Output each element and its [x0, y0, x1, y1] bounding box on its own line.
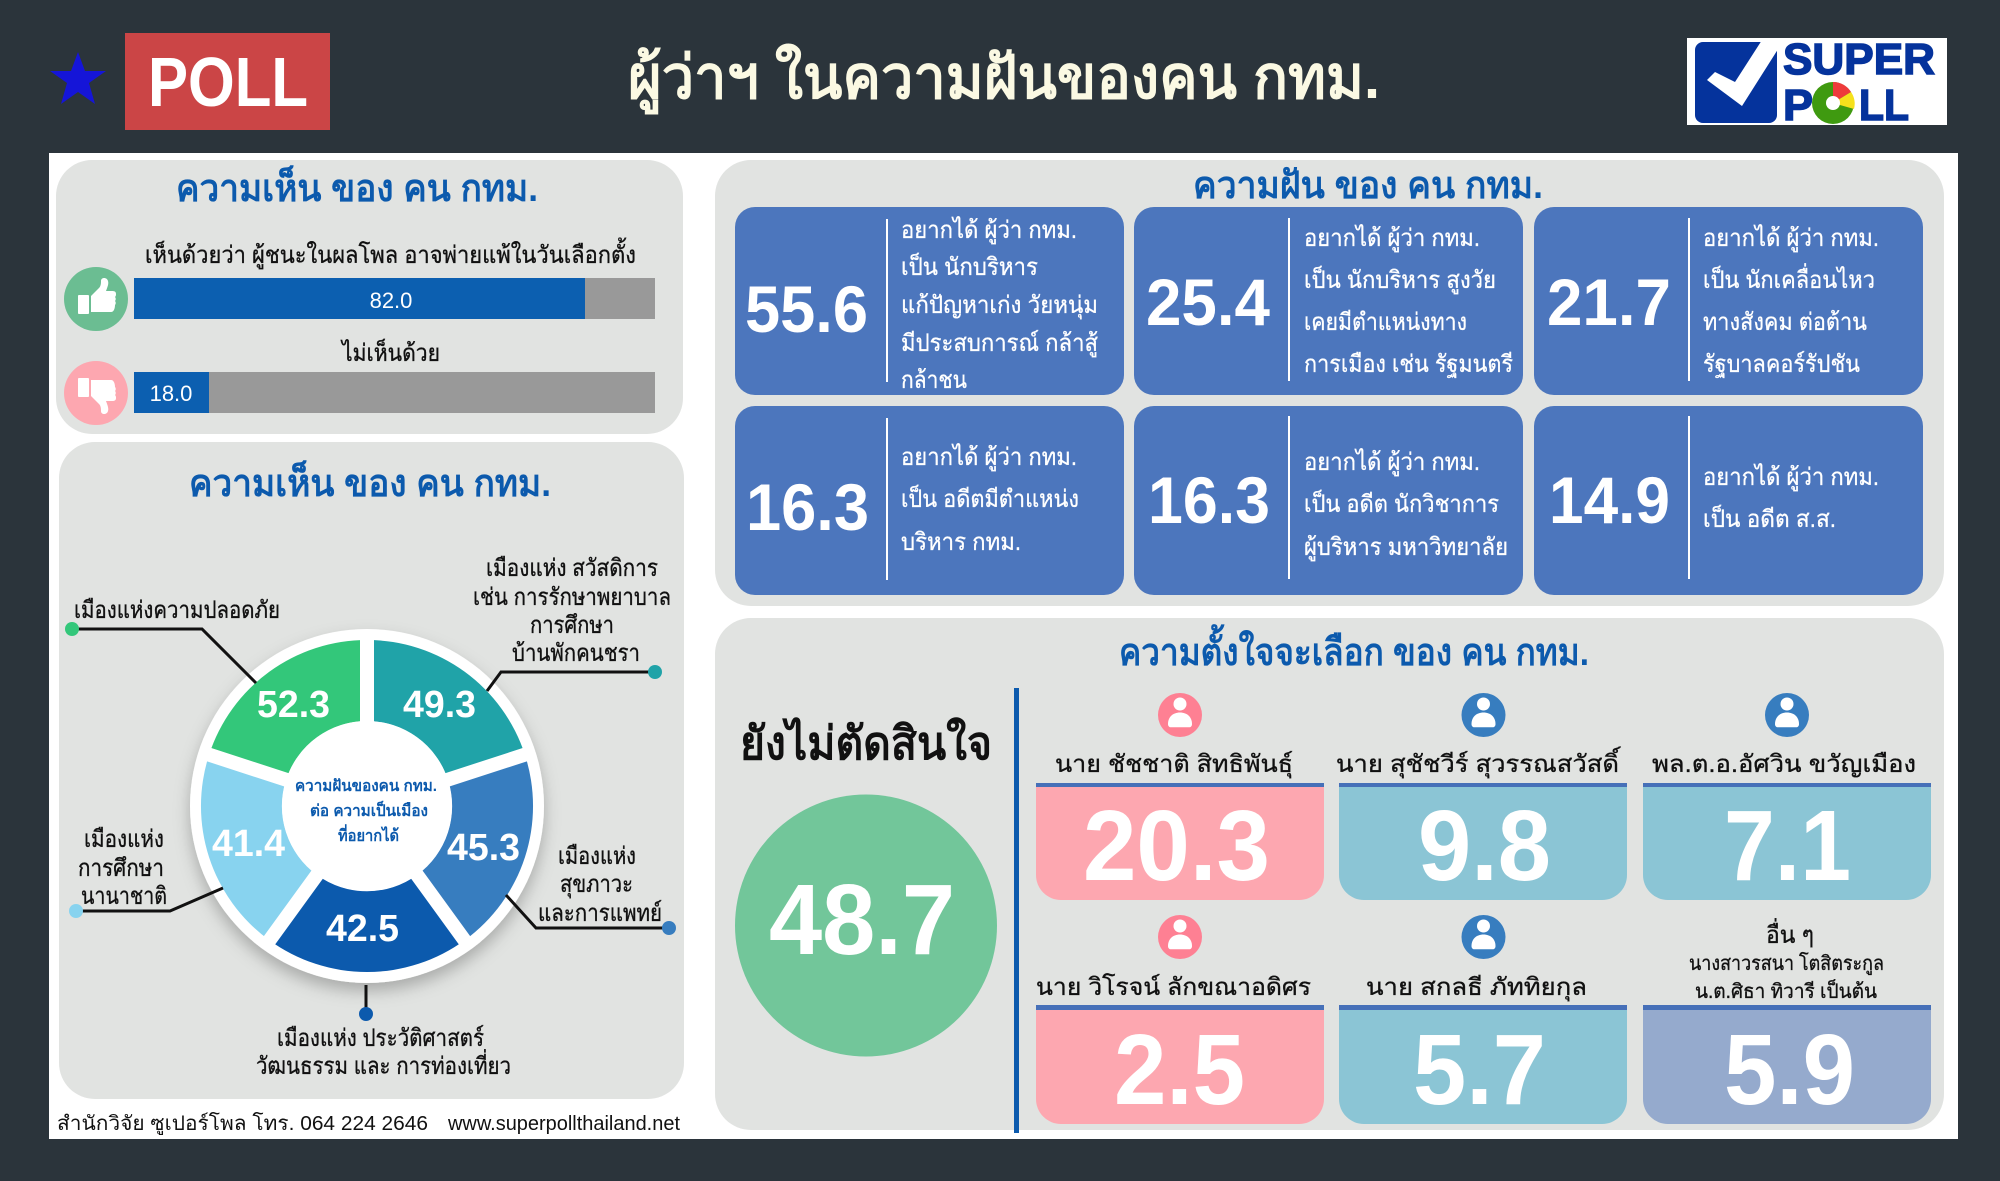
donut centre text: ความฝันของคน กทม.: [295, 777, 437, 795]
card: 14.9: เป็น อดีต ส.ส.: [1703, 504, 1836, 533]
footer source text: [57, 1112, 680, 1136]
candidate: Aswin 7.1: [1643, 693, 1931, 902]
segment: 45.3: [417, 755, 533, 940]
card: 16.3 former academic: [1134, 406, 1523, 595]
segment: 49.3: [367, 640, 525, 780]
callout: international education: นานาชาติ: [81, 883, 167, 910]
candidate: Suchatvee 9.8: 9.8: [1418, 790, 1551, 902]
callout: health: เมืองแห่ง: [558, 843, 636, 870]
callout: safety: เมืองแห่งความปลอดภัย: [74, 597, 280, 624]
card: 25.4: เคยมีตำแหน่งทาง: [1304, 309, 1467, 336]
card: 16.3 former academic: เป็น อดีต นักวิชาการ: [1304, 489, 1499, 518]
callout: history and culture: เมืองแห่ง ประวัติศาสตร์: [277, 1024, 484, 1052]
card: 25.4: [1134, 207, 1523, 395]
icon: thumbs up: [64, 267, 128, 331]
value: 52.3: 52.3: [257, 684, 330, 726]
undecided label: ยังไม่ตัดสินใจ: [740, 716, 992, 769]
segment: 41.4: [201, 755, 317, 940]
card: 55.6: มีประสบการณ์ กล้าสู้: [901, 329, 1098, 358]
label: agree statement: เห็นด้วยว่า ผู้ชนะในผลโพล อาจพ่ายแพ้ในวันเลือกตั้ง: [145, 237, 636, 270]
panel: opinion agree/disagree: [56, 160, 683, 434]
callout: health: สุขภาวะ: [560, 871, 633, 899]
card: 25.4: อยากได้ ผู้ว่า กทม.: [1304, 224, 1480, 253]
card: 21.7: รัฐบาลคอร์รัปชัน: [1703, 350, 1860, 378]
bar: disagree 18.0: 18.0: [150, 381, 192, 406]
donut centre text: ที่อยากได้: [338, 824, 399, 845]
candidate: others 5.9: [1643, 918, 1931, 1126]
panel: voting intention: [715, 618, 1944, 1133]
footer source text: สำนักวิจัย ซูเปอร์โพล โทร. 064 224 2646: [57, 1112, 428, 1136]
value: 45.3: 45.3: [447, 827, 520, 869]
candidate: Sakoltee 5.7: 5.7: [1413, 1014, 1546, 1126]
card: 16.3 former executive: บริหาร กทม.: [901, 529, 1021, 556]
callout: international education: [69, 826, 223, 918]
card: 14.9: [1534, 406, 1923, 595]
undecided value circle: [735, 794, 997, 1056]
candidate: Sakoltee 5.7: [1339, 915, 1627, 1126]
vertical divider: [1014, 688, 1019, 1133]
segment: 52.3: [209, 640, 367, 780]
candidate: Sakoltee 5.7: นาย สกลธี ภัททิยกุล: [1366, 974, 1587, 1002]
candidate: Chadchart 20.3: 20.3: [1083, 790, 1270, 902]
candidate: Aswin 7.1: 7.1: [1724, 790, 1851, 902]
header badge: POLL: POLL: [148, 43, 308, 121]
value: 49.3: 49.3: [403, 684, 476, 726]
card: 14.9: อยากได้ ผู้ว่า กทม.: [1703, 463, 1879, 492]
card: 55.6: เป็น นักบริหาร: [901, 252, 1038, 281]
callout: welfare: การศึกษา: [530, 612, 614, 639]
card: 21.7: ทางสังคม ต่อต้าน: [1703, 309, 1867, 336]
main title: ผู้ว่าฯ ในความฝันของคน กทม.: [628, 43, 1380, 115]
heading: dreams: ความฝัน ของ คน กทม.: [1193, 165, 1543, 207]
candidate: Aswin 7.1: พล.ต.อ.อัศวิน ขวัญเมือง: [1652, 751, 1916, 778]
bar: disagree 18.0: [134, 372, 655, 413]
card: 16.3 former executive: [735, 406, 1124, 595]
callout: international education: การศึกษา: [78, 855, 164, 882]
card: 55.6: [735, 207, 1124, 395]
card: 25.4: การเมือง เช่น รัฐมนตรี: [1304, 351, 1513, 378]
candidate: Suchatvee 9.8: นาย สุชัชวีร์ สุวรรณสวัสดิ์: [1336, 746, 1622, 779]
candidate: others 5.9: น.ต.ศิธา ทิวารี เป็นต้น: [1695, 978, 1877, 1003]
panel: city dream donut: [59, 442, 684, 1099]
card: 21.7: อยากได้ ผู้ว่า กทม.: [1703, 224, 1879, 253]
card: 16.3 former executive: 16.3: [746, 470, 869, 544]
footer source text: www.superpollthailand.net: [447, 1113, 680, 1135]
white content area: [49, 153, 1958, 1139]
card: 55.6: กล้าชน: [901, 367, 967, 394]
card: 16.3 former executive: อยากได้ ผู้ว่า กทม.: [901, 443, 1077, 472]
card: 16.3 former academic: ผู้บริหาร มหาวิทยาลัย: [1304, 534, 1508, 562]
card: 16.3 former executive: เป็น อดีตมีตำแหน่ง: [901, 484, 1079, 513]
card: 14.9: 14.9: [1549, 463, 1670, 537]
logo: Super Poll: SUPER: [1783, 35, 1935, 84]
candidate: Wiroj 2.5: นาย วิโรจน์ ลักขณาอดิศร: [1036, 973, 1311, 1001]
candidate: Chadchart 20.3: [1036, 693, 1324, 902]
callout: welfare: เช่น การรักษาพยาบาล: [473, 584, 671, 611]
callout: health: และการแพทย์: [538, 899, 662, 927]
donut centre text: [295, 777, 437, 845]
heading: voting intention: ความตั้งใจจะเลือก ของ คน กทม.: [1119, 624, 1589, 674]
callout: history and culture: วัฒนธรรม และ การท่องเที่ยว: [256, 1049, 511, 1080]
card: 25.4: 25.4: [1146, 265, 1270, 339]
card: 55.6: 55.6: [745, 272, 868, 346]
value: 41.4: 41.4: [212, 823, 285, 865]
callout: welfare: บ้านพักคนชรา: [512, 640, 640, 667]
heading: opinion 2: ความเห็น ของ คน กทม.: [189, 460, 551, 505]
value: 42.5: 42.5: [326, 908, 399, 950]
card: 21.7: 21.7: [1547, 265, 1671, 339]
candidate: others 5.9: อื่น ๆ: [1766, 918, 1814, 949]
candidate: others 5.9: นางสาวรสนา โตสิตระกูล: [1689, 952, 1884, 976]
label: disagree: ไม่เห็นด้วย: [340, 338, 440, 367]
callout: safety: [65, 597, 280, 683]
bar: agree 82.0: [134, 278, 655, 319]
logo: Super Poll: [1687, 35, 1947, 130]
card: 55.6: แก้ปัญหาเก่ง วัยหนุ่ม: [901, 292, 1098, 320]
card: 16.3 former academic: 16.3: [1148, 463, 1270, 537]
heading: opinion: ความเห็น ของ คน กทม.: [176, 165, 538, 210]
candidate: Wiroj 2.5: 2.5: [1114, 1014, 1245, 1126]
header icon: star: [50, 52, 106, 104]
card: 21.7: [1534, 207, 1923, 395]
candidate: others 5.9: 5.9: [1724, 1014, 1855, 1126]
icon: thumbs down: [64, 361, 128, 425]
card: 25.4: เป็น นักบริหาร สูงวัย: [1304, 265, 1496, 295]
callout: history and culture: [256, 985, 511, 1080]
donut chart: [190, 629, 544, 983]
callout: welfare: เมืองแห่ง สวัสดิการ: [486, 555, 658, 582]
candidate: Chadchart 20.3: นาย ชัชชาติ สิทธิพันธุ์: [1055, 750, 1293, 779]
card: 21.7: เป็น นักเคลื่อนไหว: [1703, 263, 1875, 294]
callout: welfare: [473, 555, 671, 691]
card: 16.3 former academic: อยากได้ ผู้ว่า กทม.: [1304, 448, 1480, 477]
card: 55.6: อยากได้ ผู้ว่า กทม.: [901, 216, 1077, 245]
panel: dreams of Bangkok residents: [715, 160, 1944, 606]
callout: international education: เมืองแห่ง: [84, 826, 164, 853]
candidate: Suchatvee 9.8: [1336, 693, 1627, 902]
candidate: Wiroj 2.5: [1036, 915, 1324, 1126]
logo: Super Poll: P: [1783, 81, 1813, 130]
undecided value circle: 48.7: [769, 864, 955, 976]
bar: agree 82.0: 82.0: [370, 288, 412, 313]
callout: health: [506, 843, 676, 935]
donut centre text: ต่อ ความเป็นเมือง: [310, 799, 428, 820]
logo: Super Poll: LL: [1859, 81, 1909, 130]
segment: 42.5: [269, 875, 465, 972]
